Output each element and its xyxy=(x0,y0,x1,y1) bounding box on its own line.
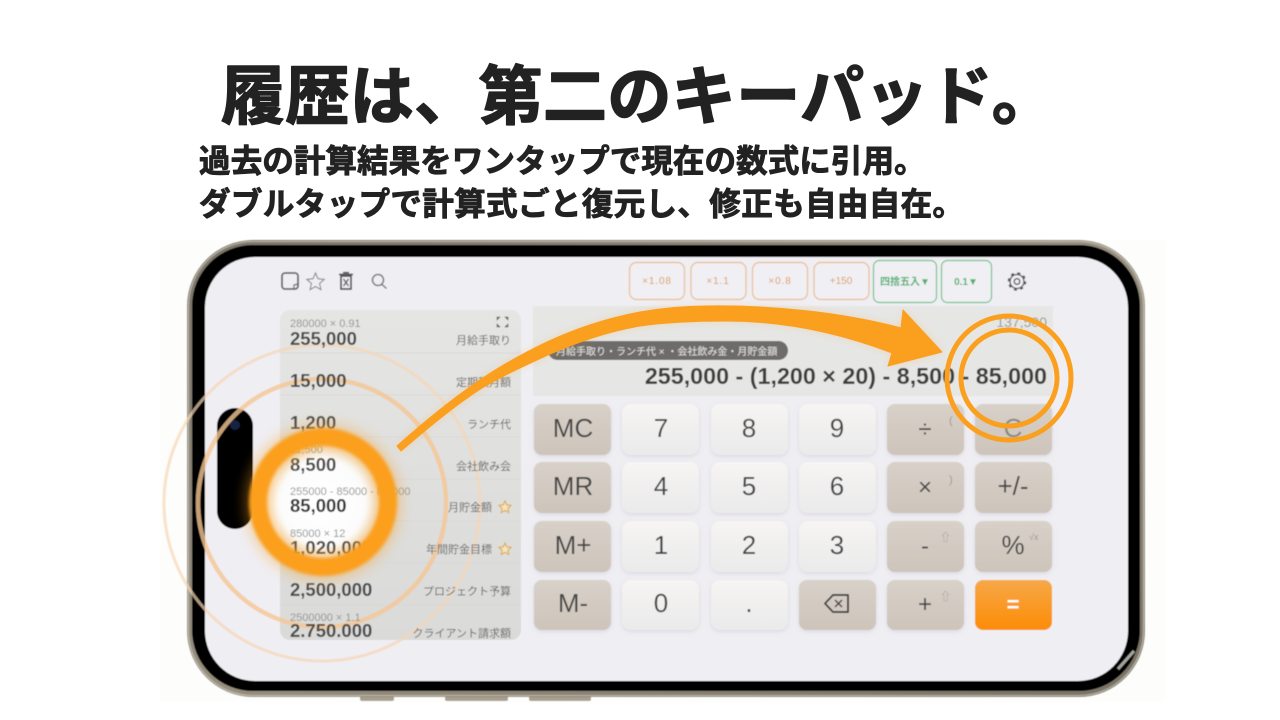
screen xyxy=(205,257,1128,681)
key labels xyxy=(553,413,1029,618)
row: 月貯金額 xyxy=(290,486,511,516)
icon: search xyxy=(373,274,386,288)
key secondary labels: ) xyxy=(949,474,953,486)
icon: memo xyxy=(282,273,298,289)
key labels: M+ xyxy=(555,530,591,560)
key secondary labels: ( xyxy=(949,415,953,427)
phone mockup xyxy=(160,240,1165,702)
row: 月給手取り: 255,000 xyxy=(290,328,357,349)
icon: trash xyxy=(339,273,353,289)
row: 月貯金額: 255000 - 85000 - 85,000 xyxy=(290,486,410,498)
bezel corner highlight xyxy=(1118,651,1134,669)
key labels: = xyxy=(1007,592,1019,617)
phone bezel xyxy=(192,245,1140,691)
equals key xyxy=(975,580,1052,630)
toolbar preset buttons: ×1.1 xyxy=(706,276,730,287)
row: 定期積立: 定期積月額 xyxy=(456,375,511,389)
row: ランチ代 xyxy=(290,416,512,432)
key labels: × xyxy=(918,474,932,501)
icon: backspace xyxy=(825,595,848,612)
toolbar preset buttons: ×0.8 xyxy=(768,276,792,287)
key labels: MC xyxy=(553,413,593,443)
toolbar preset buttons: 0.1▼ xyxy=(954,277,978,288)
expression: 255,000 - (1,200 × 20) - 8,500 - 85,000 xyxy=(645,363,1047,389)
key labels: + xyxy=(918,591,932,618)
key labels: . xyxy=(745,588,753,618)
row: クライアント請求額: クライアント請求額 xyxy=(412,626,511,640)
key block: digits xyxy=(622,404,876,630)
destination highlight rings xyxy=(947,316,1071,440)
label pill xyxy=(548,341,788,360)
side buttons xyxy=(360,696,591,701)
row: 定期積立 xyxy=(290,374,511,390)
key labels: % xyxy=(1001,530,1025,560)
row: 月給手取り: 月給手取り xyxy=(456,333,511,347)
left tap ripple rings xyxy=(164,345,480,661)
key labels: 5 xyxy=(742,471,756,501)
subtitle text: 過去の計算結果をワンタップで現在の数式に引用。 xyxy=(199,143,926,179)
row: 会社飲み会: 8,500 xyxy=(290,454,336,475)
key column: memory xyxy=(534,404,611,630)
key labels: 6 xyxy=(830,471,844,501)
key labels: C xyxy=(1004,413,1022,443)
subtitle text xyxy=(199,143,964,222)
tap spotlight glow xyxy=(254,435,390,571)
key secondary labels: √x xyxy=(1029,532,1039,542)
row: クライアント請求額 xyxy=(290,613,511,639)
phone frame xyxy=(187,240,1145,697)
history list rows xyxy=(290,318,511,641)
key labels: 3 xyxy=(830,530,844,560)
camera notch xyxy=(217,408,253,529)
row: 会社飲み会: 会社飲み会 xyxy=(456,459,511,473)
tap highlight ring xyxy=(257,436,389,568)
row: 会社飲み会: 11,500 xyxy=(290,444,323,456)
keypad xyxy=(534,404,1052,630)
row: 月給手取り xyxy=(290,318,511,349)
key labels: MR xyxy=(553,471,593,501)
toolbar preset buttons: 四捨五入▼ xyxy=(880,275,930,288)
row: 年間貯金目標: 85000 × 12 xyxy=(290,528,345,540)
row: 月貯金額: 85,000 xyxy=(290,495,347,516)
row: 年間貯金目標 xyxy=(290,528,511,558)
row: プロジェクト予算 xyxy=(290,582,511,600)
key labels: 2 xyxy=(742,530,756,560)
key labels: ÷ xyxy=(918,416,932,443)
key labels: 4 xyxy=(654,471,668,501)
curved arrow xyxy=(397,306,942,451)
row: ランチ代: ランチ代 xyxy=(467,418,511,431)
row: 年間貯金目標: 年間貯金目標 xyxy=(426,542,492,556)
label pill: 月給手取り・ランチ代 × ・会社飲み金・月貯金額 xyxy=(556,345,777,358)
row: 定期積立: 15,000 xyxy=(290,370,347,391)
icon: expand xyxy=(497,317,508,327)
previous result: 137,500 xyxy=(996,314,1047,330)
key secondary labels xyxy=(940,415,1039,603)
icon: star xyxy=(307,273,324,290)
toolbar icons xyxy=(282,273,386,290)
row: プロジェクト予算: 2,500,000 xyxy=(290,579,372,600)
key secondary labels: ⇧ xyxy=(940,589,951,603)
key secondary labels: ⇧ xyxy=(940,530,951,544)
toolbar preset buttons: ×1.08 xyxy=(642,276,672,287)
key labels: 7 xyxy=(654,413,668,443)
row: 年間貯金目標: 1,020,000 xyxy=(290,537,372,558)
row: 月貯金額: 月貯金額 xyxy=(448,500,492,514)
key labels: 9 xyxy=(830,413,844,443)
subtitle text: ダブルタップで計算式ごと復元し、修正も自由自在。 xyxy=(199,186,964,222)
toolbar preset buttons xyxy=(630,260,992,302)
key labels: 1 xyxy=(654,530,668,560)
row: プロジェクト予算: プロジェクト予算 xyxy=(423,584,511,598)
row: クライアント請求額: 2500000 × 1.1 xyxy=(290,612,361,624)
icon: settings gear xyxy=(1009,273,1025,290)
row: クライアント請求額: 2.750.000 xyxy=(290,620,372,641)
key labels: 0 xyxy=(654,588,668,618)
toolbar preset buttons: +150 xyxy=(830,276,853,287)
calculator display xyxy=(533,306,1053,396)
row: 会社飲み会 xyxy=(290,444,511,475)
key labels: 8 xyxy=(742,413,756,443)
key labels: M- xyxy=(558,588,588,618)
title: 履歴は、第二のキーパッド。 xyxy=(221,61,1056,133)
row: 月給手取り: 280000 × 0.91 xyxy=(290,318,361,330)
key labels: - xyxy=(921,533,929,560)
key block: operators xyxy=(799,404,1052,630)
key labels: +/- xyxy=(997,471,1029,501)
row: ランチ代: 1,200 xyxy=(290,412,336,433)
history list panel xyxy=(280,310,521,640)
